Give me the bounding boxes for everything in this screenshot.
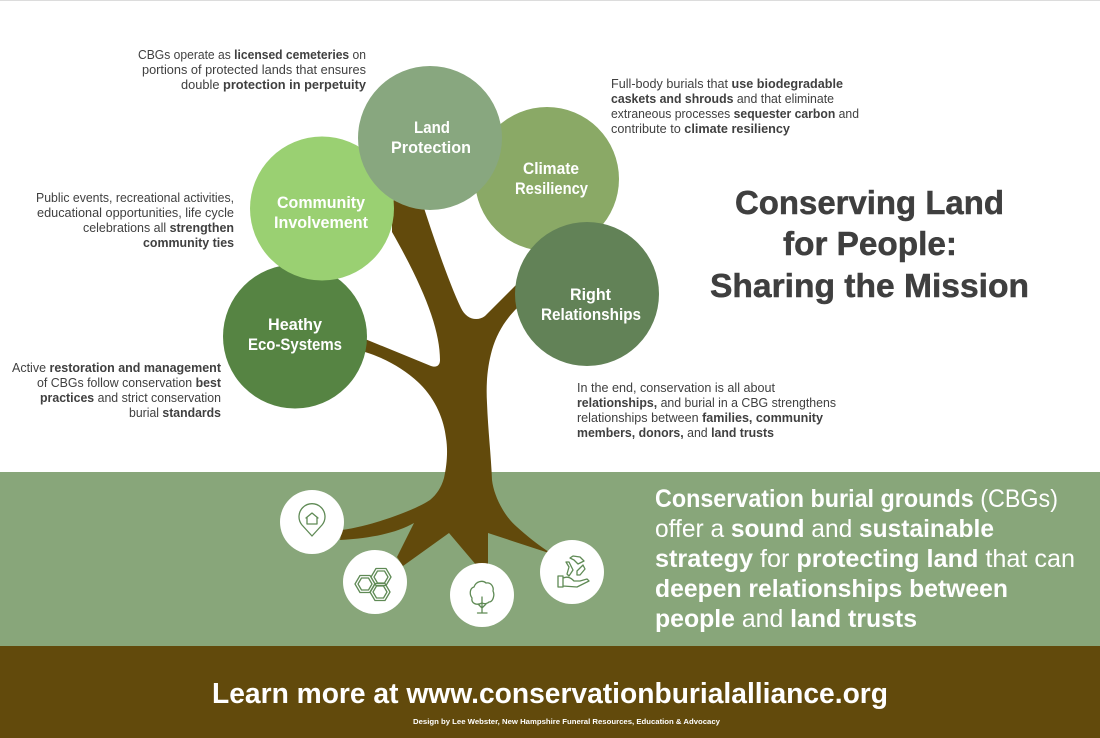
- text: climate description: contribute to climate resiliency: [611, 121, 791, 136]
- text: climate description: extraneous processes sequester carbon and: [611, 106, 859, 121]
- text: relationships description: In the end, conservation is all about: [577, 380, 775, 395]
- text: eco-systems description: practices and strict conservation: [40, 390, 221, 405]
- text: eco-systems description: [12, 360, 222, 420]
- mission statement: offer a sound and sustainable: [655, 515, 994, 543]
- circle: Right Relationships: Right: [570, 286, 611, 304]
- circle: Heathy Eco-Systems: Heathy: [268, 316, 323, 334]
- circle: Land Protection: Protection: [391, 139, 471, 157]
- circle: Community Involvement: Community: [277, 194, 366, 212]
- text: community description: Public events, recreational activities,: [36, 190, 234, 205]
- text: community description: educational opportunities, life cycle: [37, 205, 234, 220]
- icon: location pin with house: [280, 490, 344, 554]
- circle: Climate Resiliency: Climate: [523, 160, 579, 178]
- tree trunk, branches and roots: [340, 200, 552, 566]
- text: community description: community ties: [143, 235, 234, 250]
- green ground band: [0, 472, 1100, 646]
- mission statement: Conservation burial grounds (CBGs): [655, 485, 1058, 513]
- mission statement: strategy for protecting land that can: [655, 545, 1075, 573]
- text: climate description: [611, 76, 859, 136]
- circle: Climate Resiliency: Resiliency: [515, 180, 589, 198]
- circle: Climate Resiliency: [475, 107, 619, 251]
- circle: Heathy Eco-Systems: [223, 264, 367, 408]
- text: relationships description: [577, 380, 836, 440]
- circle: Right Relationships: Relationships: [541, 306, 641, 324]
- text: eco-systems description: burial standards: [129, 405, 221, 420]
- circle: Right Relationships: [515, 222, 659, 366]
- mission statement: people and land trusts: [655, 605, 917, 633]
- footer credit: Design by Lee Webster, New Hampshire Funeral Resources, Education & Advocacy: [413, 717, 721, 726]
- text: relationships description: members, donors, and land trusts: [577, 425, 774, 440]
- text: relationships description: relationships, and burial in a CBG strengthens: [577, 395, 836, 410]
- text: community description: celebrations all strengthen: [83, 220, 234, 235]
- title: Conserving Land: [735, 185, 1004, 222]
- text: land protection description: portions of protected lands that ensures: [142, 62, 366, 77]
- title: [710, 185, 1029, 305]
- footer call to action: Learn more at www.conservationburialalliance.org: [212, 678, 888, 710]
- icon: honeycomb hexagons: [343, 550, 407, 614]
- text: land protection description: [138, 47, 367, 92]
- title: for People:: [783, 226, 957, 263]
- mission statement: [655, 485, 1075, 633]
- text: climate description: caskets and shrouds and that eliminate: [611, 91, 834, 106]
- text: land protection description: double protection in perpetuity: [181, 77, 367, 92]
- circle: Heathy Eco-Systems: Eco-Systems: [248, 336, 342, 354]
- icon: hand with recycling arrows: [540, 540, 604, 604]
- title: Sharing the Mission: [710, 268, 1029, 305]
- text: relationships description: relationships between families, community: [577, 410, 824, 425]
- icon: tree: [450, 563, 514, 627]
- circle: Community Involvement: [250, 136, 394, 280]
- circle: Community Involvement: Involvement: [274, 214, 368, 232]
- mission statement: deepen relationships between: [655, 575, 1008, 603]
- circle: Land Protection: Land: [414, 119, 450, 137]
- text: climate description: Full-body burials that use biodegradable: [611, 76, 843, 91]
- circle: Land Protection: [358, 66, 502, 210]
- text: eco-systems description: Active restoration and management: [12, 360, 222, 375]
- footer band: [0, 646, 1100, 738]
- text: land protection description: CBGs operate as licensed cemeteries on: [138, 47, 366, 62]
- text: community description: [36, 190, 234, 250]
- text: eco-systems description: of CBGs follow conservation best: [37, 375, 222, 390]
